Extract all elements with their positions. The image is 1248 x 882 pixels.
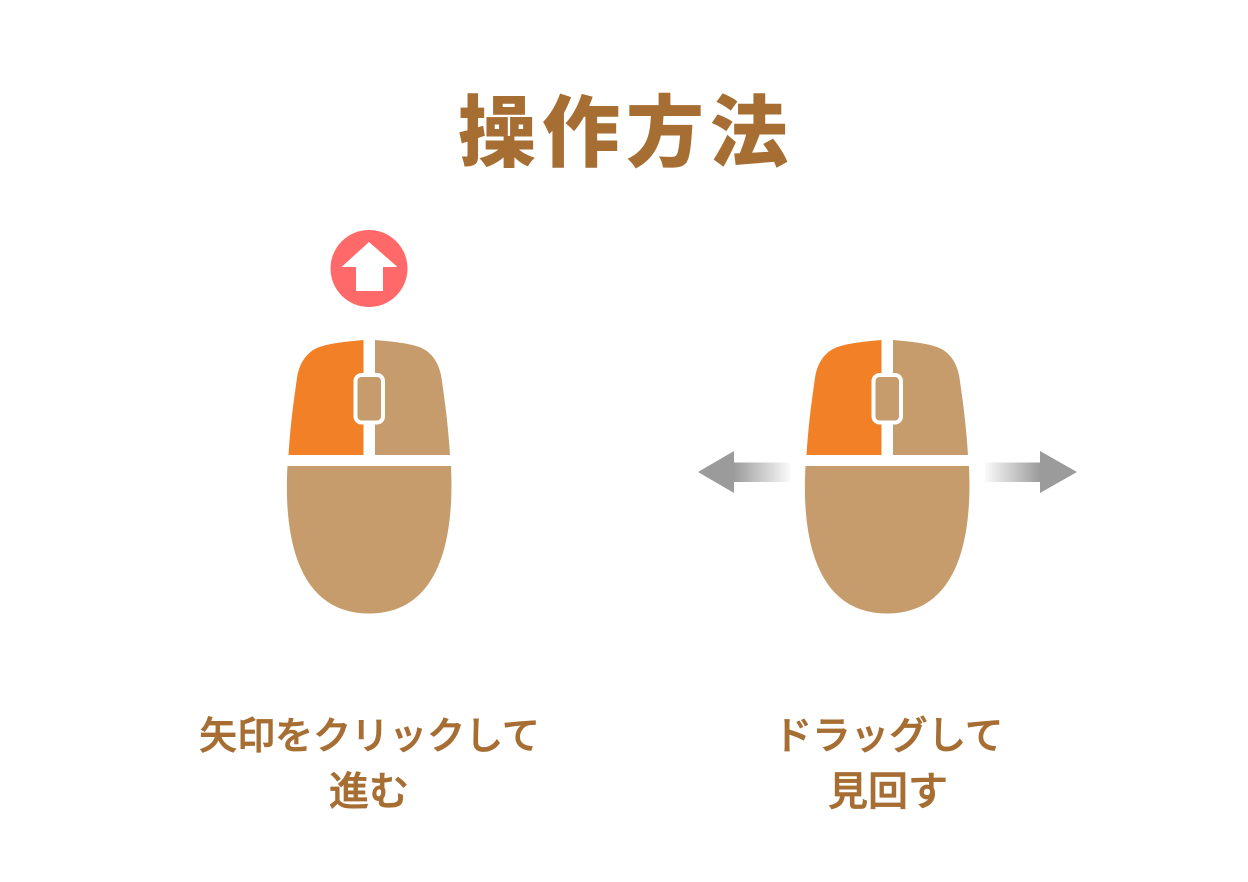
- icon: red circle with up arrow: [330, 230, 408, 307]
- caption: drag to look around: ドラッグして: [774, 715, 1003, 758]
- icon: mouse for dragging: [805, 340, 969, 614]
- arrow: drag left: [698, 451, 790, 493]
- caption: click arrow to advance: 進む: [329, 770, 409, 814]
- icon: mouse with left button highlighted: [287, 340, 451, 614]
- caption: drag to look around: 見回す: [828, 770, 948, 814]
- arrow: drag right: [985, 451, 1077, 493]
- caption: drag to look around: [774, 715, 1003, 814]
- caption: click arrow to advance: 矢印をクリックして: [199, 716, 540, 758]
- title: 操作方法: [458, 89, 794, 177]
- caption: click arrow to advance: [199, 716, 540, 814]
